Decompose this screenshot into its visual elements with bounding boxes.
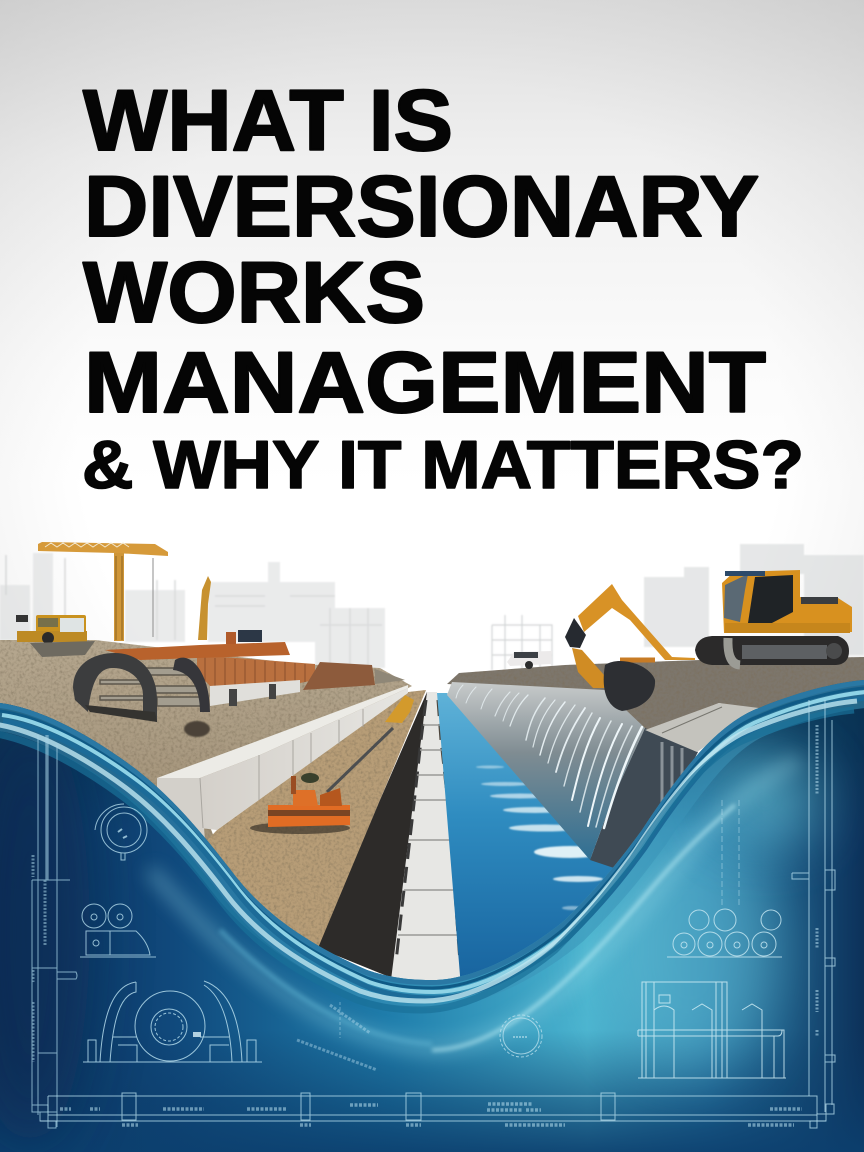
orange compactor machine <box>250 728 393 834</box>
dark boulder <box>604 661 655 711</box>
orange formwork wall <box>105 642 315 706</box>
blueprint: right drums row <box>667 800 782 957</box>
orange far machine <box>385 695 414 723</box>
weir wall with cascading water <box>447 682 698 870</box>
blueprint: gate elevation <box>638 982 786 1078</box>
blueprint: circle gauge <box>95 804 147 860</box>
sand road <box>150 690 426 1000</box>
title: DIVERSIONARY <box>84 159 759 255</box>
canal water <box>437 693 665 1000</box>
white car <box>507 651 552 669</box>
blueprint: title block strip <box>40 1002 826 1125</box>
left construction bank <box>0 640 412 880</box>
concrete arches and steps <box>73 653 210 722</box>
blue wave panel <box>0 680 864 1152</box>
title: & WHY IT MATTERS? <box>82 427 804 503</box>
wave ribbons <box>0 680 864 1050</box>
blueprint: right frame lines <box>792 700 835 1128</box>
title: MANAGEMENT <box>84 335 766 431</box>
cab and body <box>722 570 852 633</box>
right gravel bank <box>447 657 864 732</box>
central concrete track <box>391 692 461 980</box>
blueprint: left frame lines <box>32 735 77 1128</box>
blueprint: twin drums <box>80 904 156 957</box>
far material stacks <box>303 662 405 690</box>
hazy city skyline right <box>492 544 864 670</box>
blueprint: small ring <box>500 1015 542 1057</box>
black shadow strip <box>318 692 432 978</box>
boom and bucket arm <box>565 584 695 688</box>
title <box>82 73 804 503</box>
blueprint: turbine cross-section <box>83 981 262 1062</box>
concrete slab <box>645 703 759 752</box>
yellow truck <box>16 615 95 657</box>
dark excavation patch <box>184 721 210 737</box>
yellow arm <box>198 576 262 644</box>
concrete retaining wall <box>157 685 408 840</box>
tracks <box>695 636 849 665</box>
crane <box>38 542 168 641</box>
title: WORKS <box>83 245 425 341</box>
hazy city skyline left <box>0 553 385 668</box>
title: WHAT IS <box>83 73 453 169</box>
orange excavator <box>565 570 852 711</box>
